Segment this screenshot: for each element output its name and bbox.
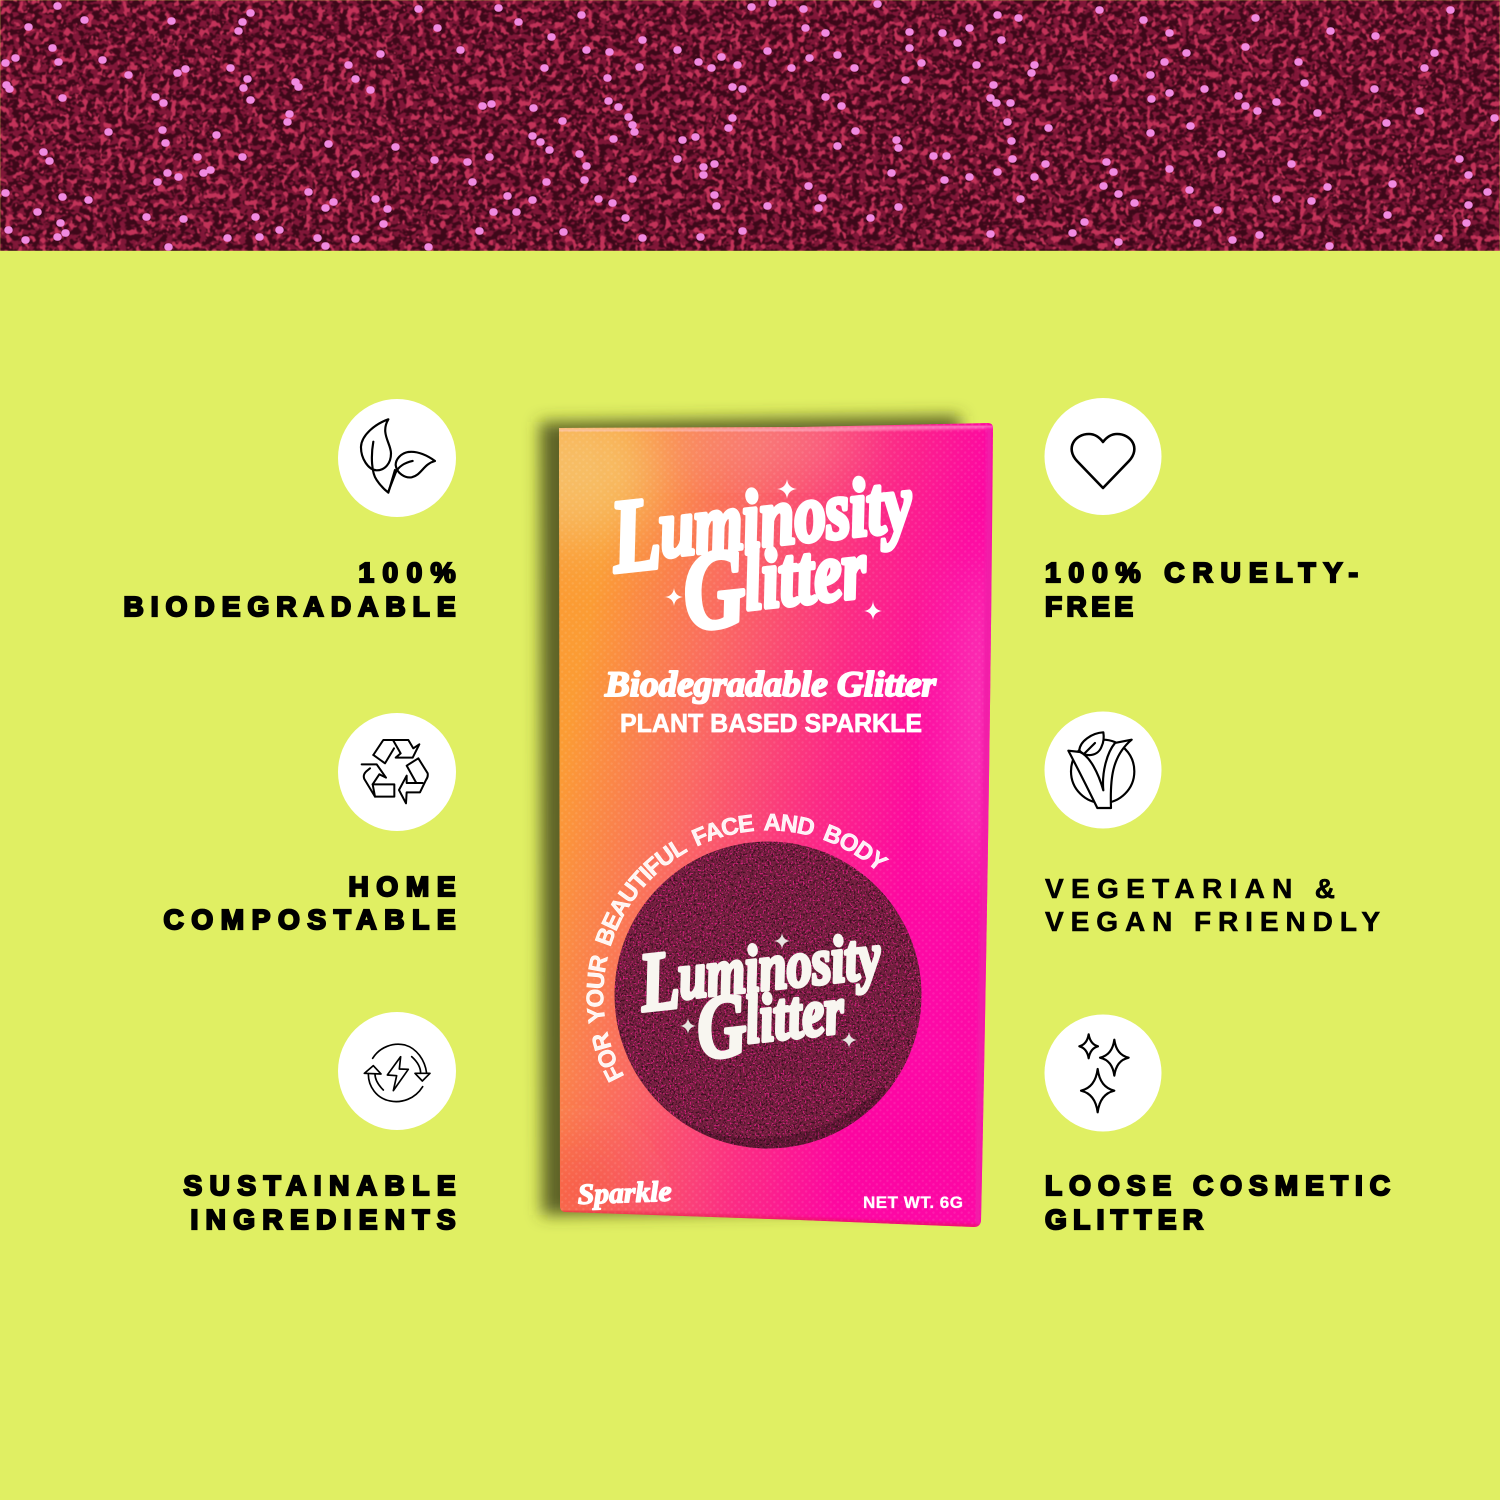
label: 100% xyxy=(358,557,456,588)
label xyxy=(1045,873,1380,937)
icon: sparkles xyxy=(1044,1014,1162,1132)
window logo: G xyxy=(692,975,751,1079)
brand logo: L xyxy=(604,475,666,595)
icon: renewable energy xyxy=(338,1012,456,1130)
brand logo: G xyxy=(677,525,751,655)
icon: leaves xyxy=(338,399,456,517)
label: LOOSE COSMETIC xyxy=(1045,1170,1390,1201)
icon: recycle xyxy=(338,713,456,831)
curved slogan: FOR YOUR BEAUTIFUL FACE AND BODY xyxy=(586,814,890,1083)
feature: vegetarian and vegan xyxy=(1044,712,1380,937)
window logo: uminosity xyxy=(674,919,885,1014)
label xyxy=(184,1170,456,1235)
window logo xyxy=(634,911,886,1079)
label xyxy=(164,871,456,935)
brand logo xyxy=(604,448,918,655)
window logo: litter xyxy=(741,971,848,1058)
label: VEGAN FRIENDLY xyxy=(1045,906,1380,937)
glitter banner xyxy=(0,0,1500,251)
product box xyxy=(559,423,993,1227)
product subtitle: Biodegradable Glitter xyxy=(604,664,937,704)
icon: heart xyxy=(1044,398,1162,515)
feature: 100% biodegradable xyxy=(124,399,456,622)
label: SUSTAINABLE xyxy=(184,1170,456,1201)
glitter window xyxy=(610,840,926,1152)
box face xyxy=(559,423,993,1227)
label xyxy=(124,557,456,622)
feature: cruelty free xyxy=(1044,398,1358,622)
icon: vegan leaves xyxy=(1044,712,1162,828)
brand logo: uminosity xyxy=(654,457,917,575)
label xyxy=(1045,1170,1390,1235)
brand logo: litter xyxy=(739,522,872,628)
feature: home compostable xyxy=(164,713,456,935)
box shadow xyxy=(540,416,965,1215)
label xyxy=(1045,557,1358,622)
feature: sustainable ingredients xyxy=(184,1012,456,1235)
plant based sparkle: PLANT BASED SPARKLE xyxy=(620,708,922,738)
label: HOME xyxy=(348,871,456,902)
label: VEGETARIAN & xyxy=(1045,873,1335,904)
shade name: Sparkle xyxy=(577,1176,672,1211)
label: FREE xyxy=(1045,591,1133,622)
net weight: NET WT. 6G xyxy=(863,1193,963,1212)
window logo: L xyxy=(634,933,684,1030)
label: GLITTER xyxy=(1045,1204,1203,1235)
feature: loose cosmetic glitter xyxy=(1044,1014,1390,1235)
label: 100% CRUELTY- xyxy=(1045,557,1358,588)
label: COMPOSTABLE xyxy=(164,904,456,935)
label: INGREDIENTS xyxy=(190,1204,456,1235)
label: BIODEGRADABLE xyxy=(124,591,456,622)
